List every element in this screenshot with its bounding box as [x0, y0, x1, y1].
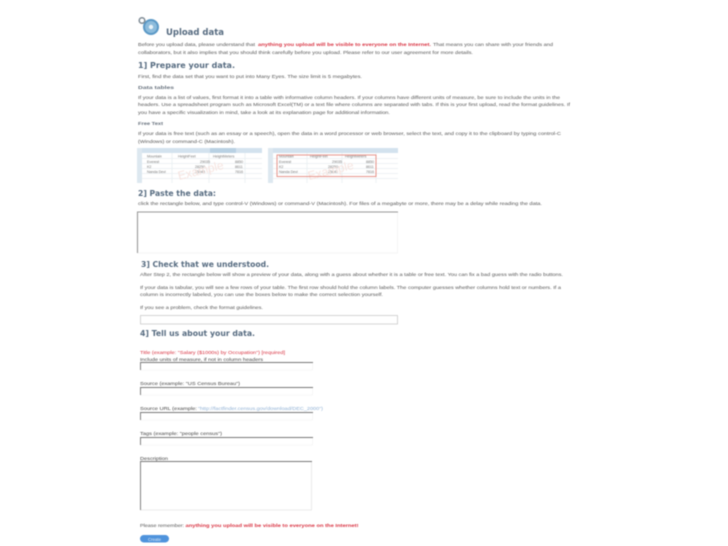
example spreadsheet: right: 28250 — [328, 165, 338, 169]
reminder — [140, 523, 359, 529]
free text paragraph: (Windows) or command-C (Macintosh). — [138, 139, 235, 145]
intro text: That means you can share with your friends and — [433, 42, 553, 48]
example spreadsheet: left: Example — [176, 158, 225, 183]
example spreadsheet: left: 29035 — [200, 160, 210, 164]
example spreadsheet: right: 25645 — [328, 170, 338, 174]
reminder: anything you upload will be visible to everyone on the Internet! — [186, 523, 359, 529]
example spreadsheet: right: K2 — [279, 165, 283, 169]
example spreadsheet: right: Nanda Devi — [279, 170, 298, 174]
example spreadsheet: left: 8611 — [235, 165, 243, 169]
heading: step 2: 2] Paste the data: — [138, 189, 216, 198]
step 3 text: If you see a problem, check the format guidelines. — [140, 305, 263, 311]
subheading: free text: Free Text — [138, 121, 163, 127]
example spreadsheet: left — [137, 148, 262, 183]
data tables text: you have a specific visualization in mind, take a look at its explanation page for additional information. — [138, 110, 390, 116]
create button: Create — [148, 537, 161, 543]
example spreadsheet: left: Mountain — [147, 154, 162, 158]
step 1 intro: First, find the data set that you want to put into Many Eyes. The size limit is 5 megabytes. — [138, 74, 362, 80]
data tables text: If your data is a list of values, first format it into a table with informative column headers. If your columns have different units of measure, be sure to include the units in the — [138, 95, 560, 101]
example spreadsheet: right: HeightFeet — [310, 154, 328, 158]
step 3 text: After Step 2, the rectangle below will show a preview of your data, along with a guess about whether it is a table or free text. You can fix a bad guess with the radio buttons. — [140, 272, 563, 278]
field: title: Include units of measure, if not in column headers — [140, 357, 264, 363]
example spreadsheet: left: Nanda Devi — [147, 170, 166, 174]
field: source — [140, 381, 313, 395]
field: title — [140, 350, 313, 370]
field: tags: Tags (example: "people census") — [140, 431, 222, 437]
intro text: collaborators, but it also implies that you should think carefully before you upload. Please refer to our user agreement for more details. — [138, 50, 473, 56]
example spreadsheet: left: 7816 — [235, 170, 243, 174]
field: description: Description — [140, 456, 168, 462]
preview box — [140, 316, 398, 324]
heading: step 4: 4] Tell us about your data. — [140, 329, 255, 338]
create button — [140, 535, 169, 543]
example spreadsheet: left: 8850 — [235, 160, 243, 164]
example spreadsheet: right: 8611 — [366, 165, 374, 169]
example spreadsheet: left: Everest — [147, 160, 159, 164]
example spreadsheet: left: HeightFeet — [178, 154, 196, 158]
step 2 text: click the rectangle below, and type control-V (Windows) or command-V (Macintosh). For files of a megabyte or more, there may be a delay while reading the data. — [138, 201, 542, 207]
example spreadsheet: left: HeightMeters — [213, 154, 235, 158]
heading: step 1: 1] Prepare your data. — [138, 61, 235, 70]
field: description — [140, 456, 312, 510]
example spreadsheet: right: 29035 — [332, 160, 342, 164]
free text paragraph: If your data is free text (such as an essay or a speech), open the data in a word processor or web browser, select the text, and copy it to the clipboard by typing control-C — [138, 131, 562, 137]
data tables text — [138, 95, 571, 116]
example spreadsheet: left: 28250 — [195, 165, 205, 169]
subheading: data tables: Data tables — [138, 85, 174, 91]
example spreadsheet: right: Example — [306, 158, 355, 183]
example spreadsheet: left: 25645 — [195, 170, 205, 174]
free text paragraph — [138, 131, 562, 145]
field: source url: Source URL (example: — [140, 406, 197, 412]
title: Upload data — [166, 27, 224, 37]
reminder: Please remember: — [140, 523, 184, 529]
example spreadsheet: right: 8850 — [366, 160, 374, 164]
example spreadsheet: right: Mountain — [279, 154, 294, 158]
example spreadsheet: right: 7816 — [366, 170, 374, 174]
intro text: Before you upload data, please understand that — [138, 42, 256, 48]
example spreadsheet: left: K2 — [147, 165, 151, 169]
textarea: paste data — [138, 212, 398, 253]
intro text — [138, 42, 553, 56]
step 3 text: column is incorrectly labeled, you can use the boxes below to make the correct selection yourself. — [140, 292, 383, 298]
heading: step 3: 3] Check that we understood. — [141, 260, 269, 269]
step 3 text: If your data is tabular, you will see a few rows of your table. The first row should hold the column labels. The computer guesses whether columns hold text or numbers. If a — [140, 285, 561, 291]
intro text: anything you upload will be visible to everyone on the Internet. — [258, 42, 432, 48]
field: source url — [140, 406, 323, 420]
field: tags — [140, 431, 313, 445]
example spreadsheet: right — [268, 148, 398, 183]
step 3 text — [140, 272, 563, 311]
data tables text: headers. Use a spreadsheet program such as Microsoft Excel(TM) or a text file where columns are separated with tabs. If this is your first upload, read the format guidelines. If — [138, 102, 571, 108]
example spreadsheet: right: HeightMeters — [345, 154, 367, 158]
example spreadsheet: right: Everest — [279, 160, 291, 164]
icon: gears — [139, 18, 158, 34]
field: source: Source (example: "US Census Bureau") — [140, 381, 240, 387]
field: title: Title (example: "Salary ($1000s) by Occupation") [required] — [140, 350, 286, 356]
field: source url: "http://factfinder.census.gov/download/DEC_2000") — [198, 406, 323, 412]
